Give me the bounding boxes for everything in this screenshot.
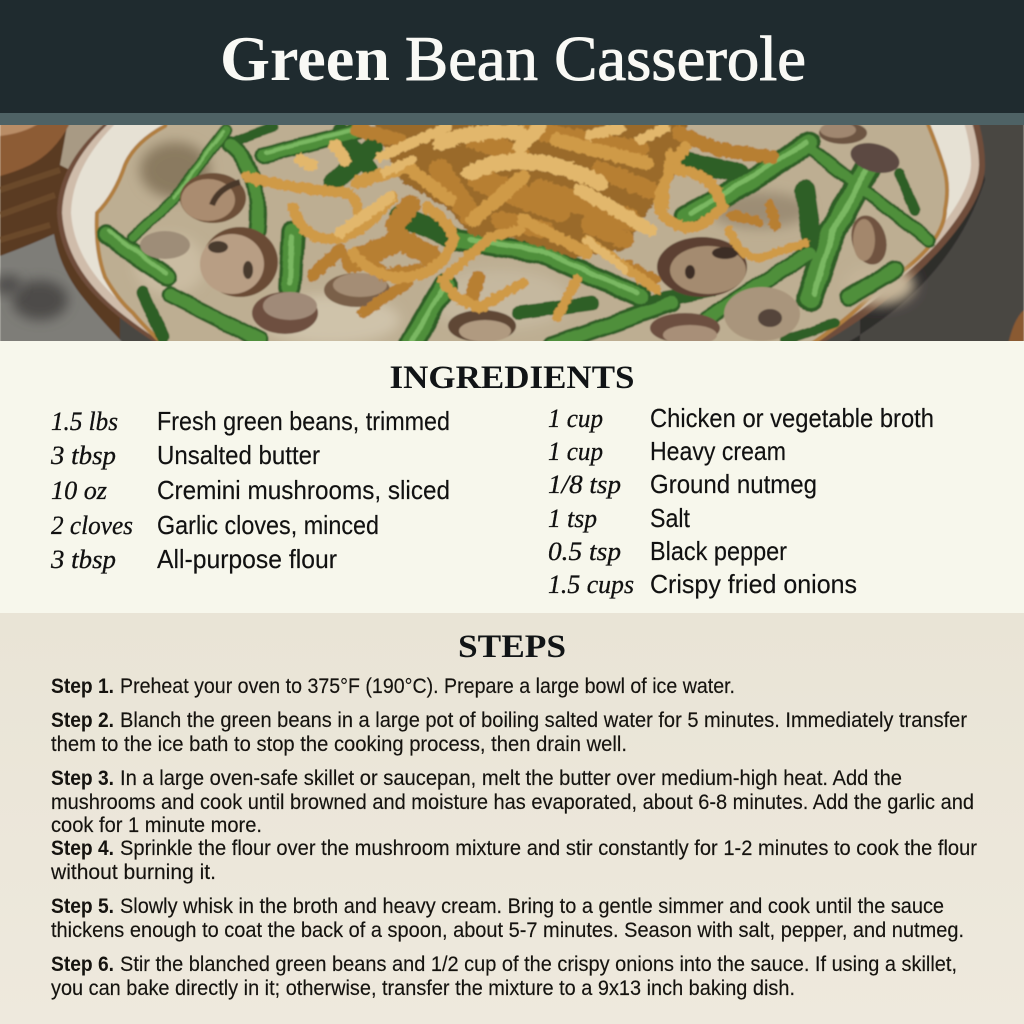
ingredient list left column: 3 tbsp <box>50 441 116 470</box>
ingredient list left column: 2 cloves <box>51 511 133 540</box>
step 5 <box>51 894 964 942</box>
step 2 <box>51 708 967 756</box>
panel: steps <box>0 613 1024 1024</box>
dish rim and wall <box>57 125 986 341</box>
ingredient list left column: Fresh green beans, trimmed <box>157 406 450 436</box>
title: Green <box>220 23 390 94</box>
step 3 <box>51 766 974 837</box>
panel: ingredients <box>0 341 1024 613</box>
ingredient list left column: Cremini mushrooms, sliced <box>157 475 450 505</box>
sauce <box>94 125 950 341</box>
step 1: Step 1. <box>51 674 114 698</box>
crispy fried onions <box>247 115 805 317</box>
step 5: Step 5. <box>51 894 114 918</box>
ingredient list left column: 1.5 lbs <box>51 407 118 436</box>
step 4: Step 4. <box>51 836 114 860</box>
ingredient list right column: Crispy fried onions <box>650 569 857 599</box>
photo background: table and cloth <box>0 125 1024 341</box>
title <box>220 23 806 94</box>
heading: steps: STEPS <box>458 629 566 665</box>
step 6: Stir the blanched green beans and 1/2 cup of the crispy onions into the sauce. If using a skillet, <box>120 952 957 976</box>
step 6 <box>51 952 957 1000</box>
ingredient list right column: 1.5 cups <box>548 570 634 599</box>
step 3: In a large oven-safe skillet or saucepan, melt the butter over medium-high heat. Add the <box>120 766 902 790</box>
ingredient list right column <box>548 403 934 599</box>
header banner <box>0 0 1024 125</box>
step 6: Step 6. <box>51 952 114 976</box>
mushrooms <box>140 122 903 345</box>
step 4: without burning it. <box>50 860 216 884</box>
step 5: thickens enough to coat the back of a spoon, about 5-7 minutes. Season with salt, pepper, and nutmeg. <box>51 918 964 942</box>
step 2: them to the ice bath to stop the cooking process, then drain well. <box>51 732 627 756</box>
ingredient list left column: Unsalted butter <box>157 440 320 470</box>
ingredient list left column: 3 tbsp <box>50 545 116 574</box>
step 4 <box>50 836 977 884</box>
step 4: Sprinkle the flour over the mushroom mixture and stir constantly for 1-2 minutes to cook the flour <box>120 836 977 860</box>
ingredient list right column: Salt <box>650 503 691 533</box>
ingredient list right column: 1 cup <box>548 437 603 466</box>
ingredient list left column: All-purpose flour <box>157 544 337 574</box>
food photo: green bean casserole dish <box>0 125 1024 341</box>
ingredient list right column: 0.5 tsp <box>548 537 621 566</box>
ingredient list left column <box>50 406 450 574</box>
ingredient list right column: 1 cup <box>548 404 603 433</box>
step 1: Preheat your oven to 375°F (190°C). Prepare a large bowl of ice water. <box>120 674 735 698</box>
ingredient list right column: Black pepper <box>650 536 787 566</box>
step 5: Slowly whisk in the broth and heavy cream. Bring to a gentle simmer and cook until the sauce <box>120 894 944 918</box>
ingredient list left column: Garlic cloves, minced <box>157 510 379 540</box>
step 3: Step 3. <box>51 766 114 790</box>
step 2: Step 2. <box>51 708 114 732</box>
ingredient list right column: Chicken or vegetable broth <box>650 403 934 433</box>
ingredient list right column: Heavy cream <box>650 436 786 466</box>
ingredient list right column: 1/8 tsp <box>548 470 621 499</box>
step 2: Blanch the green beans in a large pot of boiling salted water for 5 minutes. Immediately transfer <box>120 708 967 732</box>
step 6: you can bake directly in it; otherwise, transfer the mixture to a 9x13 inch baking dish. <box>51 976 795 1000</box>
title: Bean Casserole <box>405 23 806 94</box>
ingredient list right column: 1 tsp <box>548 504 597 533</box>
step 3: mushrooms and cook until browned and moisture has evaporated, about 6-8 minutes. Add the garlic and <box>51 790 974 814</box>
step 3: cook for 1 minute more. <box>51 813 262 837</box>
heading: ingredients: INGREDIENTS <box>390 360 634 396</box>
ingredient list left column: 10 oz <box>51 476 107 505</box>
green beans <box>107 127 929 345</box>
ingredient list right column: Ground nutmeg <box>650 469 817 499</box>
